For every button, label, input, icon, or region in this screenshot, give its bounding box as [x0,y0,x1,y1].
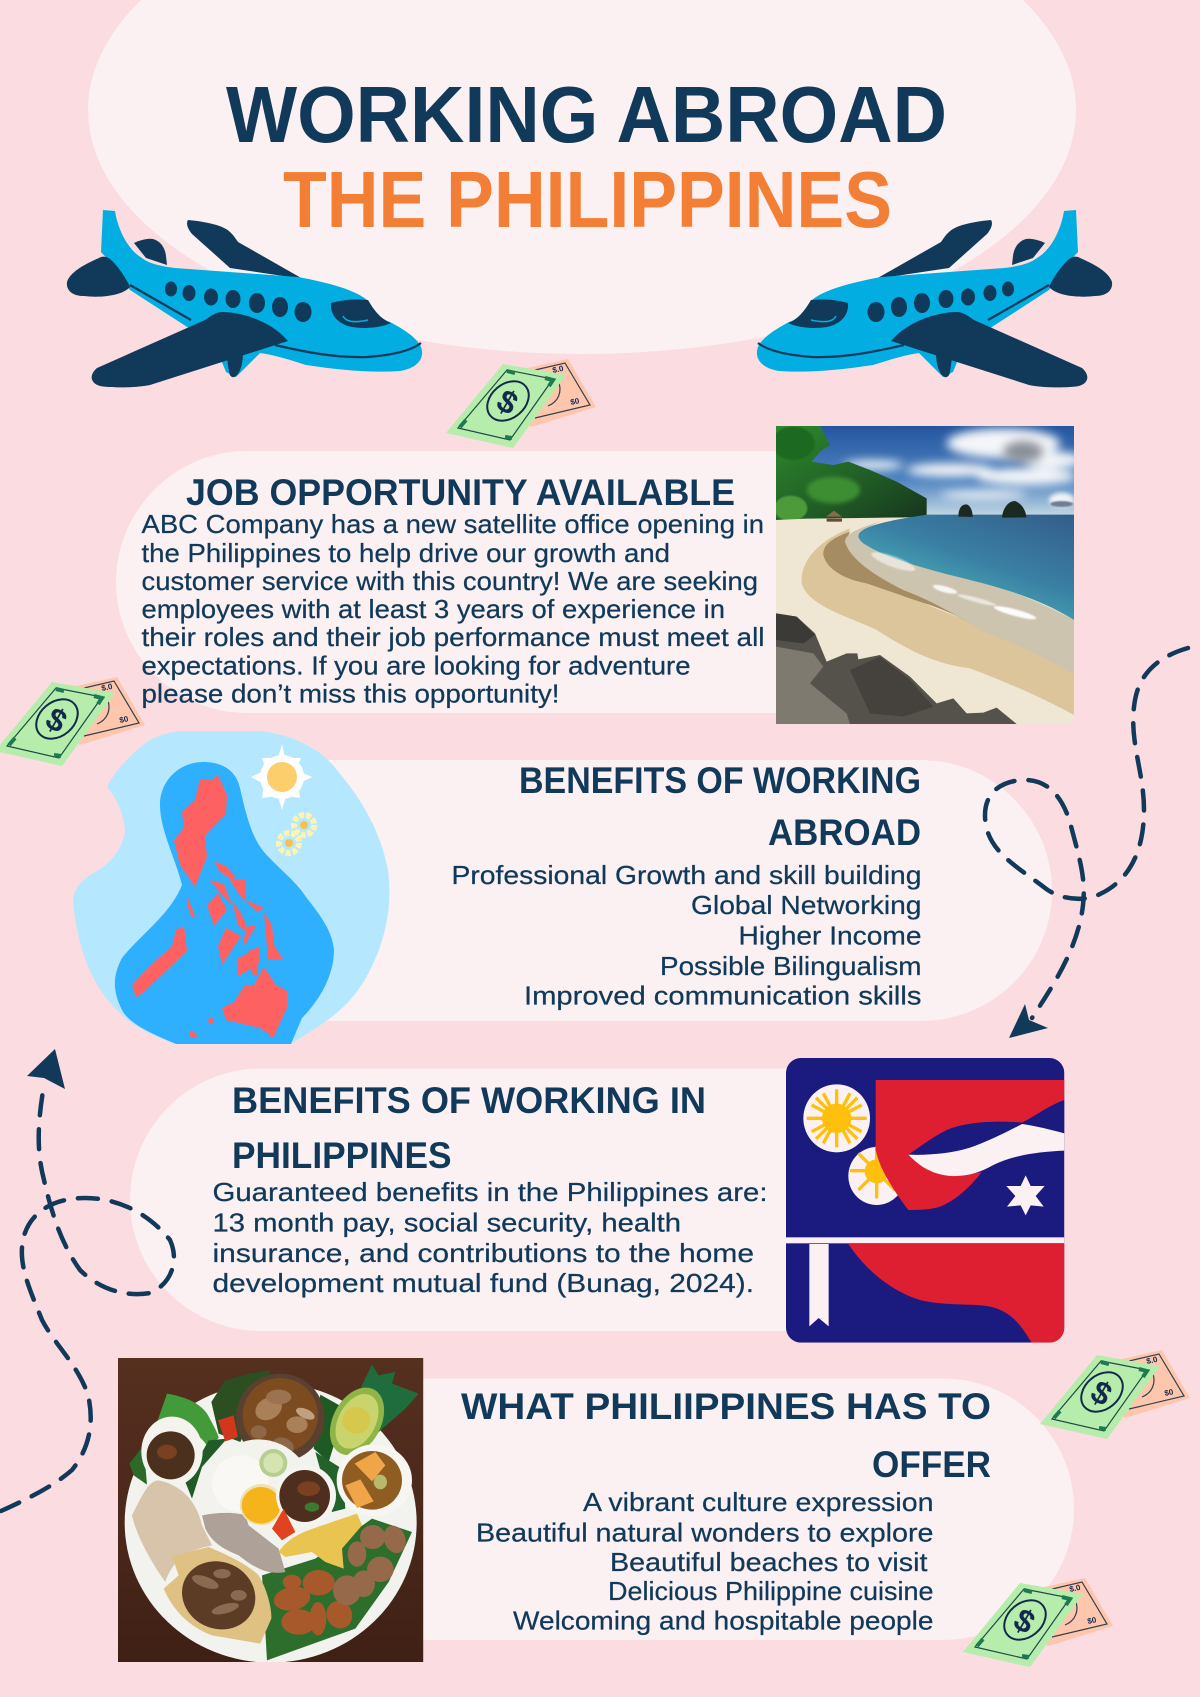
icon: money left: $0 [119,714,130,725]
panel: benefits of working abroad [290,760,1052,1021]
icon: money bottom: $ [1008,1601,1041,1641]
icon: money top: $0 [570,396,581,407]
panel: benefits of working in philippines [130,1068,800,1331]
flag suns [803,1084,905,1205]
heading: job opportunity available: JOB OPPORTUNITY AVAILABLE [186,472,735,513]
icon: money left: $ [40,700,73,740]
list: benefits abroad: Higher Income [738,920,922,950]
icon: money top [446,359,596,448]
list: what the philippines offers: Delicious Philippine cuisine [608,1576,934,1606]
icon: money top: $.0 [552,364,565,375]
list: benefits abroad: Global Networking [691,890,922,920]
icon: money bottom [963,1578,1113,1667]
heading: benefits of working in philippines [232,1080,706,1176]
panel background: benefits philippines [130,1068,800,1331]
list: benefits abroad [452,860,922,1010]
dashed arrow: left flight path [1,1049,174,1511]
illustration: stylised flag [786,1058,1064,1343]
islands [132,775,287,1038]
panel background: offer [410,1378,1074,1640]
title [226,70,947,244]
heading: benefits of working abroad [519,760,921,853]
dashed arrow: right flight path [985,648,1188,1038]
heading: benefits of working abroad: BENEFITS OF WORKING [519,760,921,801]
icon: left airplane [67,210,422,387]
body text: job description: the Philippines to help drive our growth and [142,538,670,568]
body text: guaranteed benefits [212,1177,768,1298]
icon: sun [251,744,312,810]
title line: working abroad: WORKING ABROAD [226,70,947,159]
icon: money right: $0 [1164,1387,1175,1398]
list: benefits abroad: Improved communication skills [524,980,922,1010]
icon: money right: $.0 [1146,1355,1159,1366]
icon: money left: $.0 [101,682,114,693]
heading: benefits of working abroad: ABROAD [768,812,921,853]
heading: benefits of working in philippines: PHILIPPINES [232,1135,452,1176]
icon: money right [1040,1350,1190,1439]
body text: job description: expectations. If you are looking for adventure [142,650,690,680]
icon: money top: $ [491,382,524,422]
list: what the philippines offers: A vibrant culture expression [583,1487,934,1517]
list: what the philippines offers [476,1487,934,1636]
heading: what philiippines has to offer: WHAT PHILIIPPINES HAS TO [461,1386,991,1427]
flag star [1006,1175,1045,1215]
photo: filipino food platter [118,1358,424,1662]
body text: guaranteed benefits: development mutual fund (Bunag, 2024). [212,1268,754,1298]
body text: guaranteed benefits: insurance, and contributions to the home [212,1238,754,1268]
heading: what philiippines has to offer [461,1386,991,1485]
panel: what philippines has to offer [410,1378,1074,1640]
list: benefits abroad: Possible Bilingualism [660,951,922,981]
body text: job description: employees with at least 3 years of experience in [142,594,725,624]
heading: what philiippines has to offer: OFFER [872,1444,991,1485]
body text: job description: ABC Company has a new satellite office opening in [142,509,764,539]
body text: job description: customer service with this country! We are seeking [142,566,758,596]
header ellipse panel [88,0,1076,354]
list: what the philippines offers: Beautiful beaches to visit [610,1547,928,1577]
icon: flowers [279,815,314,853]
body text: job description: their roles and their job performance must meet all [142,622,764,652]
body text: job description: please don’t miss this opportunity! [142,678,560,708]
panel: job opportunity [116,451,790,713]
illustration: philippines map [73,731,389,1044]
list: what the philippines offers: Welcoming and hospitable people [513,1606,934,1636]
panel background: job opportunity [116,451,790,713]
icon: money bottom: $0 [1087,1615,1098,1626]
icon: money left [0,677,145,766]
panel background: benefits abroad [290,760,1052,1021]
icon: money bottom: $.0 [1069,1583,1082,1594]
title line: the philippines: THE PHILIPPINES [283,155,892,244]
body text: job description [142,509,764,708]
list: benefits abroad: Professional Growth and skill building [452,860,922,890]
icon: right airplane [757,210,1112,387]
heading: benefits of working in philippines: BENEFITS OF WORKING IN [232,1080,706,1121]
body text: guaranteed benefits: Guaranteed benefits in the Philippines are: [212,1177,768,1207]
icon: money right: $ [1085,1373,1118,1413]
photo: tropical beach [776,426,1074,724]
body text: guaranteed benefits: 13 month pay, social security, health [212,1208,681,1238]
list: what the philippines offers: Beautiful natural wonders to explore [476,1518,934,1548]
